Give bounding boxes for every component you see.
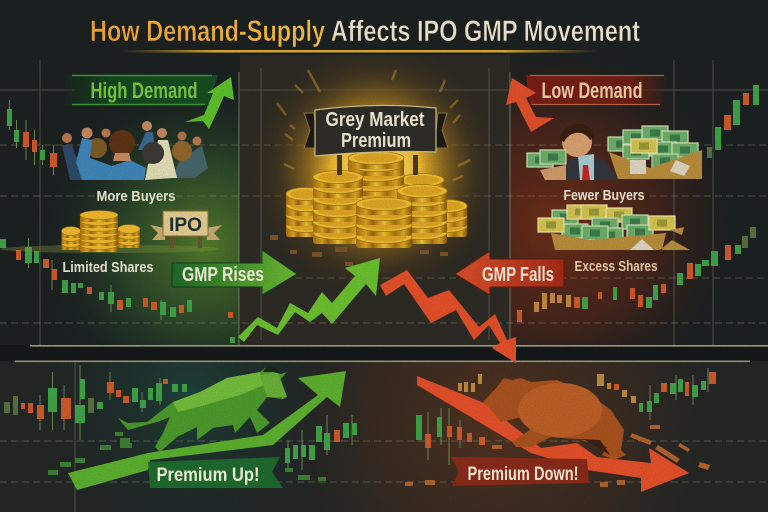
icon: green bull (118, 367, 287, 452)
icon: cash box (608, 126, 702, 179)
icon: brown bear (483, 378, 626, 460)
ipo sign: IPO (169, 215, 202, 236)
premium sign (304, 105, 448, 175)
falling zigzag arrow (380, 270, 516, 363)
debris (48, 432, 326, 481)
premium down label: Premium Down! (468, 464, 578, 485)
high demand banner arrow (65, 75, 234, 129)
premium sign: Grey Market (326, 109, 425, 131)
premium up label: Premium Up! (156, 465, 260, 486)
more buyers label: More Buyers (96, 188, 176, 205)
low demand banner arrow (506, 75, 668, 132)
panel: premium down (405, 376, 710, 492)
gold coin stacks (286, 152, 467, 248)
limited shares label: Limited Shares (62, 259, 154, 276)
gmp rises arrow: GMP Rises (182, 264, 264, 286)
rising zigzag arrow (238, 258, 380, 342)
gmp falls arrow: GMP Falls (482, 264, 554, 286)
panel: grey market premium (241, 55, 509, 285)
fewer buyers label: Fewer Buyers (564, 187, 644, 204)
panel: low demand (506, 75, 702, 275)
icon: sad buyer with cash (527, 124, 619, 180)
gmp falls arrow (455, 251, 564, 295)
up arrow (68, 371, 346, 490)
high demand banner arrow: High Demand (90, 78, 198, 103)
premium sign: Premium (341, 130, 411, 152)
panel: high demand (0, 75, 234, 276)
premium down label (451, 457, 589, 486)
down arrow (417, 376, 689, 492)
golden glow (241, 55, 509, 285)
low demand banner arrow: Low Demand (542, 78, 642, 103)
premium up label (148, 457, 283, 488)
icon: excess shares cash pile (538, 205, 690, 250)
excess shares label: Excess Shares (574, 258, 658, 275)
debris (405, 425, 710, 487)
icon: cheering crowd (62, 121, 208, 180)
icon: small coins (0, 211, 220, 253)
gmp rises arrow (172, 250, 297, 295)
background candlesticks (0, 85, 759, 470)
panel: premium up (48, 367, 346, 490)
ipo sign (150, 211, 222, 248)
